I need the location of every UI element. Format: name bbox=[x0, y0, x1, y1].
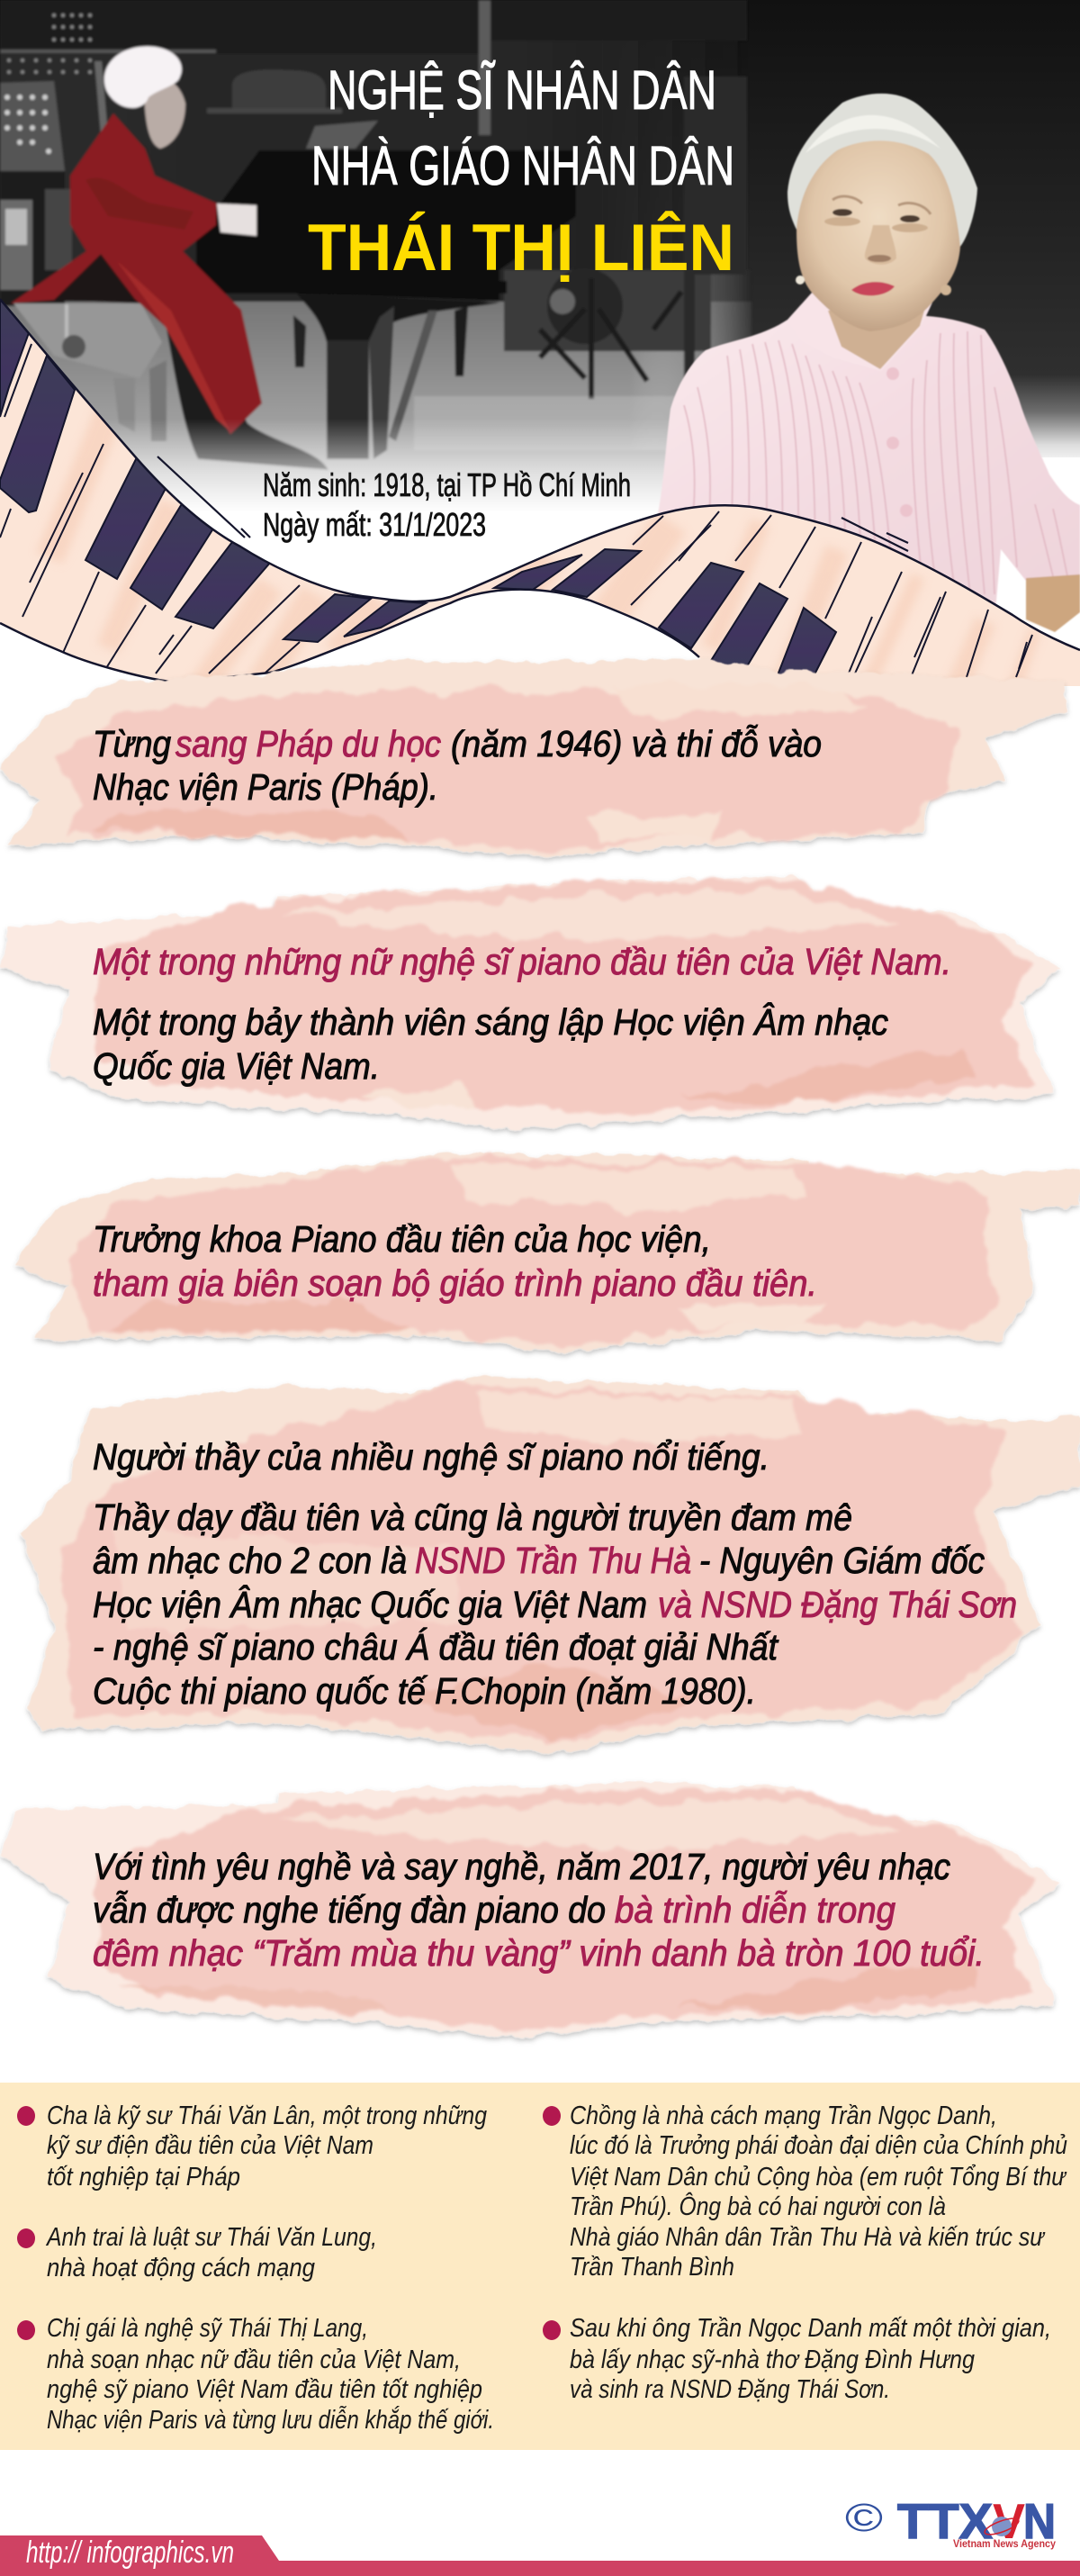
panel: teacher of famous pianists: âm nhạc cho 2 con là bbox=[93, 1540, 407, 1581]
hair and face bbox=[144, 77, 185, 149]
black keys bbox=[0, 300, 836, 680]
hair bbox=[788, 94, 977, 248]
panel: first head of piano faculty: tham gia biên soạn bộ giáo trình piano đầu tiên. bbox=[93, 1262, 817, 1304]
note: husband: Chồng là nhà cách mạng Trần Ngọc Danh, bbox=[570, 2101, 997, 2130]
logo: TTXVN: TTX bbox=[897, 2493, 993, 2549]
copyright symbol: © bbox=[845, 2496, 883, 2540]
note: sister: Nhạc viện Paris và từng lưu diễn khắp thế giới. bbox=[47, 2405, 494, 2435]
white key shading bbox=[50, 405, 1035, 693]
panel: teacher of famous pianists: Cuộc thi piano quốc tế F.Chopin (năm 1980). bbox=[93, 1670, 756, 1712]
panel: studied in France bbox=[0, 659, 1067, 856]
header background bbox=[0, 0, 1080, 468]
panel: teacher of famous pianists bbox=[21, 1377, 1080, 1754]
note: sister: Chị gái là nghệ sỹ Thái Thị Lang, bbox=[47, 2314, 368, 2343]
dark trousers bbox=[166, 329, 328, 470]
piano legs bbox=[327, 340, 369, 459]
collar bbox=[788, 293, 932, 371]
torn paper shape bbox=[21, 1377, 1080, 1754]
panel: 100th birthday concert: đêm nhạc “Trăm mùa thu vàng” vinh danh bà tròn 100 tuổi. bbox=[93, 1932, 985, 1974]
panel: teacher of famous pianists: NSND Trần Thu Hà bbox=[415, 1540, 691, 1581]
shirt buttons bbox=[886, 367, 913, 517]
note: brother bbox=[17, 2223, 377, 2282]
note: sister bbox=[17, 2314, 494, 2435]
panel: teacher of famous pianists: và NSND Đặng Thái Sơn bbox=[658, 1584, 1017, 1625]
title: NHÀ GIÁO NHÂN DÂN bbox=[311, 135, 734, 196]
red coat bbox=[11, 113, 262, 434]
torn paper shape bbox=[0, 1783, 1060, 2038]
title: NGHỆ SĨ NHÂN DÂN bbox=[328, 59, 716, 121]
note: second marriage: và sinh ra NSND Đặng Thái Sơn. bbox=[570, 2375, 890, 2404]
logo: TTXVN: Vietnam News Agency bbox=[953, 2537, 1056, 2550]
note: sister: nhà soạn nhạc nữ đầu tiên của Việt Nam, bbox=[47, 2346, 461, 2374]
photo: pianist at the grand piano bbox=[0, 0, 752, 513]
panel: teacher of famous pianists: - Nguyên Giám đốc bbox=[699, 1540, 985, 1581]
shirt bbox=[652, 316, 1080, 621]
note: brother: nhà hoạt động cách mạng bbox=[47, 2254, 315, 2282]
panel: teacher of famous pianists: Học viện Âm nhạc Quốc gia Việt Nam bbox=[93, 1584, 647, 1625]
piano body bbox=[196, 150, 576, 301]
panel: teacher of famous pianists: Thầy dạy đầu tiên và cũng là người truyền đam mê bbox=[93, 1496, 852, 1538]
loose pen strokes bbox=[158, 456, 908, 551]
panel: studied in France: (năm 1946) và thi đỗ vào bbox=[451, 723, 822, 764]
birth and death dates: Ngày mất: 31/1/2023 bbox=[263, 506, 486, 543]
torn paper shape bbox=[0, 659, 1067, 856]
note: husband bbox=[543, 2101, 1067, 2282]
face bbox=[796, 140, 960, 331]
face details bbox=[796, 196, 951, 295]
note: second marriage bbox=[543, 2314, 1051, 2404]
music stand rows bbox=[7, 14, 92, 74]
birth and death dates bbox=[263, 466, 631, 543]
portrait of Thái Thị Liên bbox=[652, 94, 1080, 632]
key divider lines bbox=[0, 344, 1032, 677]
note: father bbox=[17, 2101, 487, 2192]
panel: first female pianist bbox=[0, 876, 1060, 1129]
panel: studied in France: sang Pháp du học bbox=[176, 723, 441, 764]
panel: studied in France: Nhạc viện Paris (Pháp). bbox=[93, 766, 438, 808]
panel: studied in France: Từng bbox=[93, 723, 171, 764]
panel: 100th birthday concert bbox=[0, 1783, 1060, 2038]
panel: 100th birthday concert: vẫn được nghe tiếng đàn piano do bbox=[93, 1889, 606, 1930]
panel: 100th birthday concert: Với tình yêu nghề và say nghề, năm 2017, người yêu nhạc bbox=[93, 1846, 950, 1887]
panel: first female pianist: Quốc gia Việt Nam. bbox=[93, 1045, 380, 1087]
torn paper shape bbox=[0, 876, 1060, 1129]
title: THÁI THỊ LIÊN bbox=[308, 212, 734, 285]
logo: TTXVN: V bbox=[993, 2493, 1025, 2549]
footer bar bbox=[0, 2535, 1080, 2576]
panel: first female pianist: Một trong những nữ nghệ sĩ piano đầu tiên của Việt Nam. bbox=[93, 941, 951, 982]
drum and tripod bbox=[547, 268, 623, 344]
neck bbox=[828, 302, 927, 369]
note: father: kỹ sư điện đầu tiên của Việt Nam bbox=[47, 2131, 374, 2160]
panel: family notes bbox=[0, 2083, 1080, 2450]
logo: TTXVN bbox=[897, 2493, 1056, 2550]
note: husband: Trần Thanh Bình bbox=[570, 2253, 734, 2282]
piano keyboard ribbon bbox=[0, 288, 1080, 702]
footer bar: http:// infographics.vn bbox=[26, 2535, 234, 2570]
panel: 100th birthday concert: bà trình diễn trong bbox=[615, 1889, 896, 1930]
note: sister: nghệ sỹ piano Việt Nam đầu tiên tốt nghiệp bbox=[47, 2375, 482, 2404]
note: father: Cha là kỹ sư Thái Văn Lân, một trong những bbox=[47, 2101, 487, 2130]
note: brother: Anh trai là luật sư Thái Văn Lung, bbox=[45, 2223, 377, 2252]
panel: teacher of famous pianists: - nghệ sĩ piano châu Á đầu tiên đoạt giải Nhất bbox=[93, 1626, 778, 1668]
panel: first head of piano faculty: Trưởng khoa Piano đầu tiên của học viện, bbox=[93, 1218, 711, 1260]
bench bbox=[14, 303, 162, 378]
hands on the keys bbox=[217, 203, 256, 236]
birth and death dates: Năm sinh: 1918, tại TP Hồ Chí Minh bbox=[263, 466, 631, 503]
shirt pleats bbox=[684, 331, 1067, 594]
panel: first head of piano faculty bbox=[14, 1153, 1080, 1352]
title bbox=[308, 59, 734, 285]
panel: first female pianist: Một trong bảy thành viên sáng lập Học viện Âm nhạc bbox=[93, 1001, 888, 1043]
chair bbox=[232, 69, 326, 113]
white fade below the photo bbox=[0, 419, 756, 513]
note: father: tốt nghiệp tại Pháp bbox=[47, 2163, 240, 2192]
torn paper shape bbox=[14, 1153, 1080, 1352]
note: second marriage: bà lấy nhạc sỹ-nhà thơ Đặng Đình Hưng bbox=[570, 2346, 975, 2374]
hand bbox=[1026, 574, 1080, 632]
panel: teacher of famous pianists: Người thầy của nhiều nghệ sĩ piano nổi tiếng. bbox=[93, 1436, 770, 1478]
note: husband: Trần Phú). Ông bà có hai người con là bbox=[570, 2191, 946, 2221]
logo: TTXVN: N bbox=[1023, 2493, 1056, 2549]
